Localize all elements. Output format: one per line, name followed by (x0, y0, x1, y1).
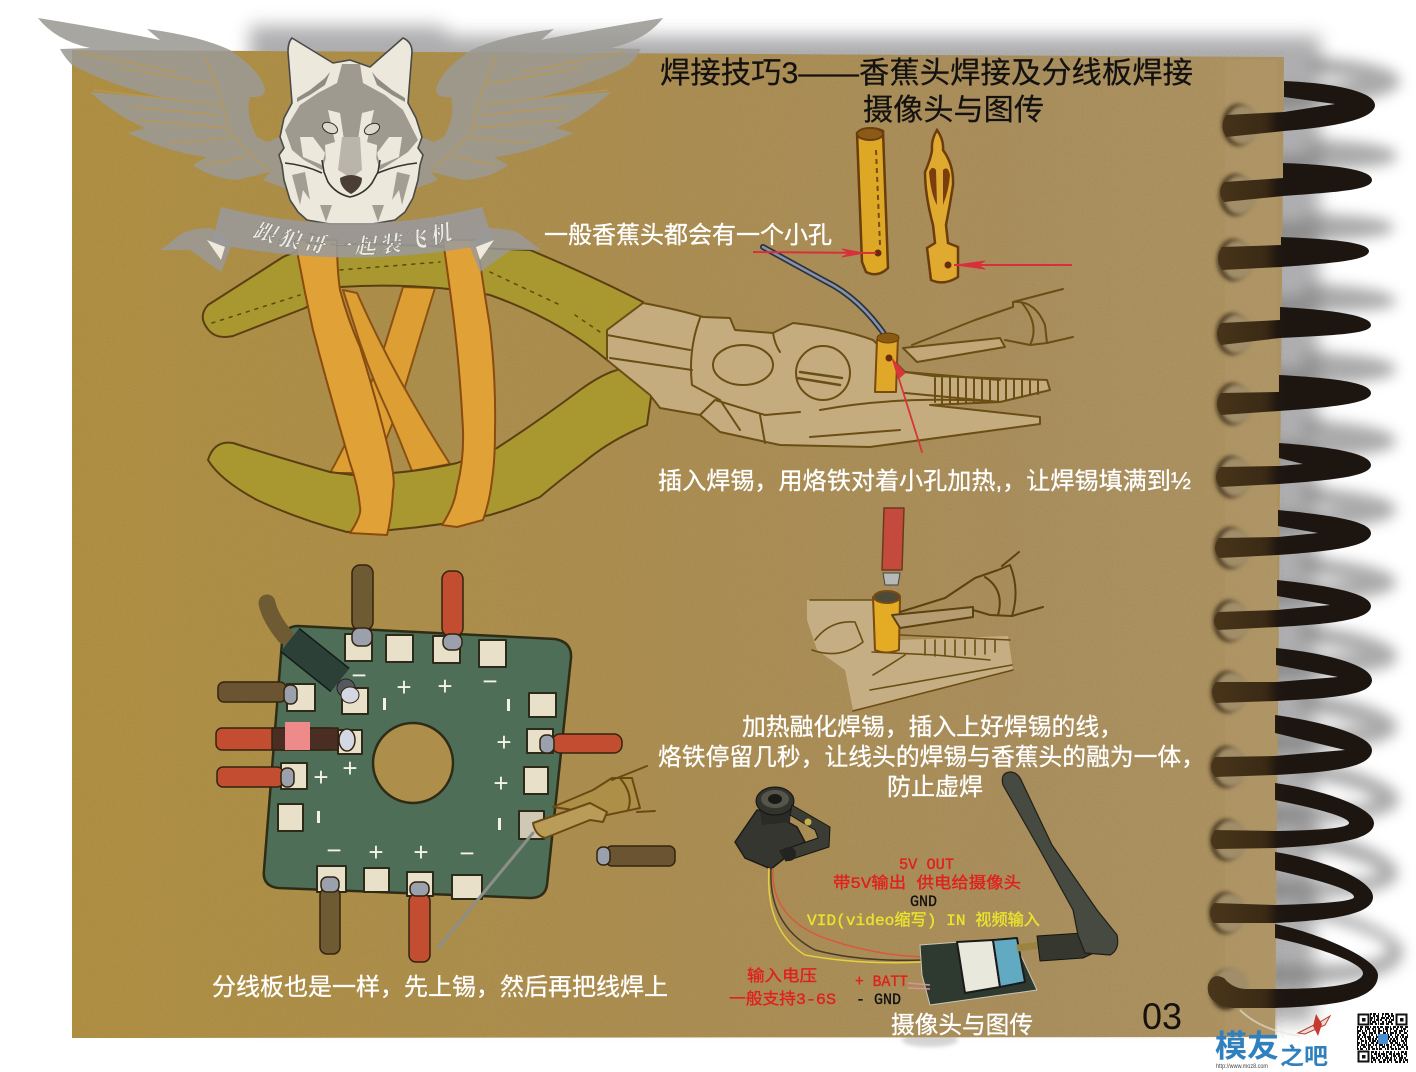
wire tips (281, 628, 610, 896)
antenna (1002, 772, 1118, 961)
plus and minus markings: + (396, 672, 412, 702)
plus and minus markings: + (342, 753, 358, 783)
wiring labels (729, 856, 1040, 1009)
board body (264, 626, 571, 898)
moz8 logo: 之吧 (1280, 1043, 1328, 1069)
moz8 logo: http://www.moz8.com (1216, 1064, 1268, 1070)
wiring labels: 一般支持3-6S (729, 990, 836, 1009)
wires (216, 565, 675, 962)
second pliers and iron illustration (807, 508, 1043, 711)
soldering iron (892, 552, 1043, 628)
plier head (607, 303, 1050, 447)
caption: melt solder: 烙铁停留几秒，让线头的焊锡与香蕉头的融为一体， (658, 744, 1205, 771)
centre hole (373, 723, 453, 803)
moz8 logo: 模友 (1215, 1029, 1279, 1064)
camera bracket (780, 805, 830, 861)
soldering iron top (903, 289, 1073, 362)
red arrow to female hole (753, 249, 876, 257)
plus and minus markings: + (437, 671, 453, 701)
QR code (1357, 1013, 1408, 1063)
heat shrink wire (267, 603, 359, 703)
camera lens (756, 787, 794, 825)
solder tip (883, 573, 900, 585)
banner: 跟狼哥一起装飞机 (252, 220, 452, 256)
moz8 logo (1215, 1010, 1330, 1070)
paper sheet (72, 50, 1284, 1038)
plus and minus markings (313, 660, 512, 868)
wiring labels: VID(video缩写) IN 视频输入 (807, 911, 1040, 930)
wiring labels: + BATT (855, 973, 908, 991)
caption: melt solder: 防止虚焊 (887, 774, 983, 801)
camera wires (769, 868, 922, 963)
caption: insert solder: 插入焊锡，用烙铁对着小孔加热,，让焊锡填满到½ (658, 468, 1191, 495)
power distribution board (216, 565, 675, 962)
plier handle bottom (208, 368, 652, 532)
arrow to connector hole (893, 360, 922, 452)
video transmitter (908, 938, 1037, 1005)
solder pads (278, 634, 556, 899)
title: 摄像头与图传 (863, 94, 1044, 127)
banana connector: female (857, 128, 888, 274)
plus and minus markings: − (326, 835, 342, 865)
coil shadows (1233, 57, 1403, 984)
wiring labels: 5V OUT (899, 856, 954, 874)
front straps (295, 240, 495, 535)
plus and minus markings: + (313, 762, 329, 792)
spiral binding coils (1208, 81, 1378, 1008)
pliers silhouette (807, 600, 1013, 710)
banner (160, 207, 541, 272)
plus and minus markings: + (496, 727, 512, 757)
pliers illustration (203, 240, 1073, 535)
banana connector: male (925, 130, 958, 282)
caption: melt solder: 加热融化焊锡，插入上好焊锡的线， (742, 714, 1123, 741)
airplane icon (1298, 1014, 1330, 1036)
solder wire (438, 833, 533, 948)
wiring labels: 输入电压 (747, 967, 817, 986)
connector opening (874, 591, 900, 603)
title (660, 57, 1193, 127)
wolf head (279, 38, 423, 224)
background page shadow (250, 26, 1320, 1047)
caption: distribution board: 分线板也是一样，先上锡，然后再把线焊上 (212, 974, 668, 1001)
plus and minus markings: − (351, 660, 367, 690)
crossing rear straps (330, 287, 450, 473)
wire into connector (763, 247, 887, 338)
handle stitching (212, 262, 600, 332)
banner slogan (252, 236, 460, 254)
binder holes (1209, 104, 1260, 1010)
plier handle top (203, 244, 643, 360)
wing left (38, 18, 295, 192)
caption: melt solder (658, 714, 1205, 801)
pink pad under wire (285, 722, 310, 750)
wiring labels: 带5V输出 供电给摄像头 (833, 874, 1021, 893)
watermark logo: wolf and wings (38, 18, 663, 272)
plus and minus markings: + (368, 837, 384, 867)
connector (873, 594, 900, 652)
red arrow to male hole (954, 261, 1072, 269)
connector on pliers (875, 333, 899, 392)
power leads (908, 983, 930, 989)
caption: camera and transmitter: 摄像头与图传 (891, 1012, 1033, 1039)
fpv camera (735, 787, 830, 869)
solder stick (882, 508, 904, 570)
plus and minus markings: − (482, 666, 498, 696)
plus and minus markings: + (493, 768, 509, 798)
wing right (406, 18, 663, 192)
plier details (607, 318, 1038, 443)
plus and minus markings: − (459, 838, 475, 868)
soldering iron on board (533, 766, 655, 838)
caption: small hole: 一般香蕉头都会有一个小孔 (544, 222, 832, 249)
plus and minus markings: + (413, 837, 429, 867)
page number: 03 (1142, 996, 1182, 1037)
wiring labels: - GND (856, 991, 901, 1009)
title: 焊接技巧3——香蕉头焊接及分线板焊接 (660, 57, 1193, 90)
wiring labels: GND (910, 893, 937, 911)
